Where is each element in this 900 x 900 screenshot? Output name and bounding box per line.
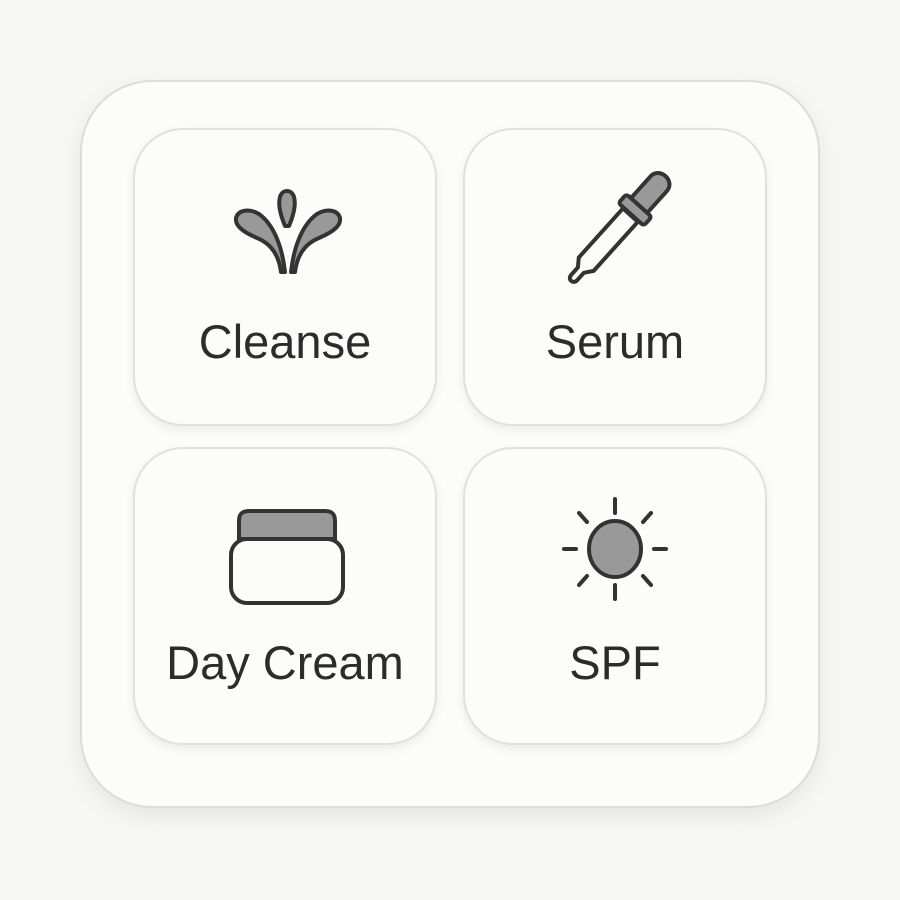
card: SPF [463,447,767,745]
panel: outer container [80,80,820,808]
label: SPF: SPF [569,636,661,689]
card: Day Cream [133,447,437,745]
label: Serum: Serum [546,315,684,368]
card: Serum [463,128,767,426]
label: Cleanse: Cleanse [199,315,371,368]
icon: dropper [568,171,672,284]
label: Day Cream: Day Cream [166,636,404,689]
icon: water splash [234,189,342,274]
icon: cream jar [229,509,345,605]
card: Cleanse [133,128,437,426]
icon: sun [562,497,668,601]
